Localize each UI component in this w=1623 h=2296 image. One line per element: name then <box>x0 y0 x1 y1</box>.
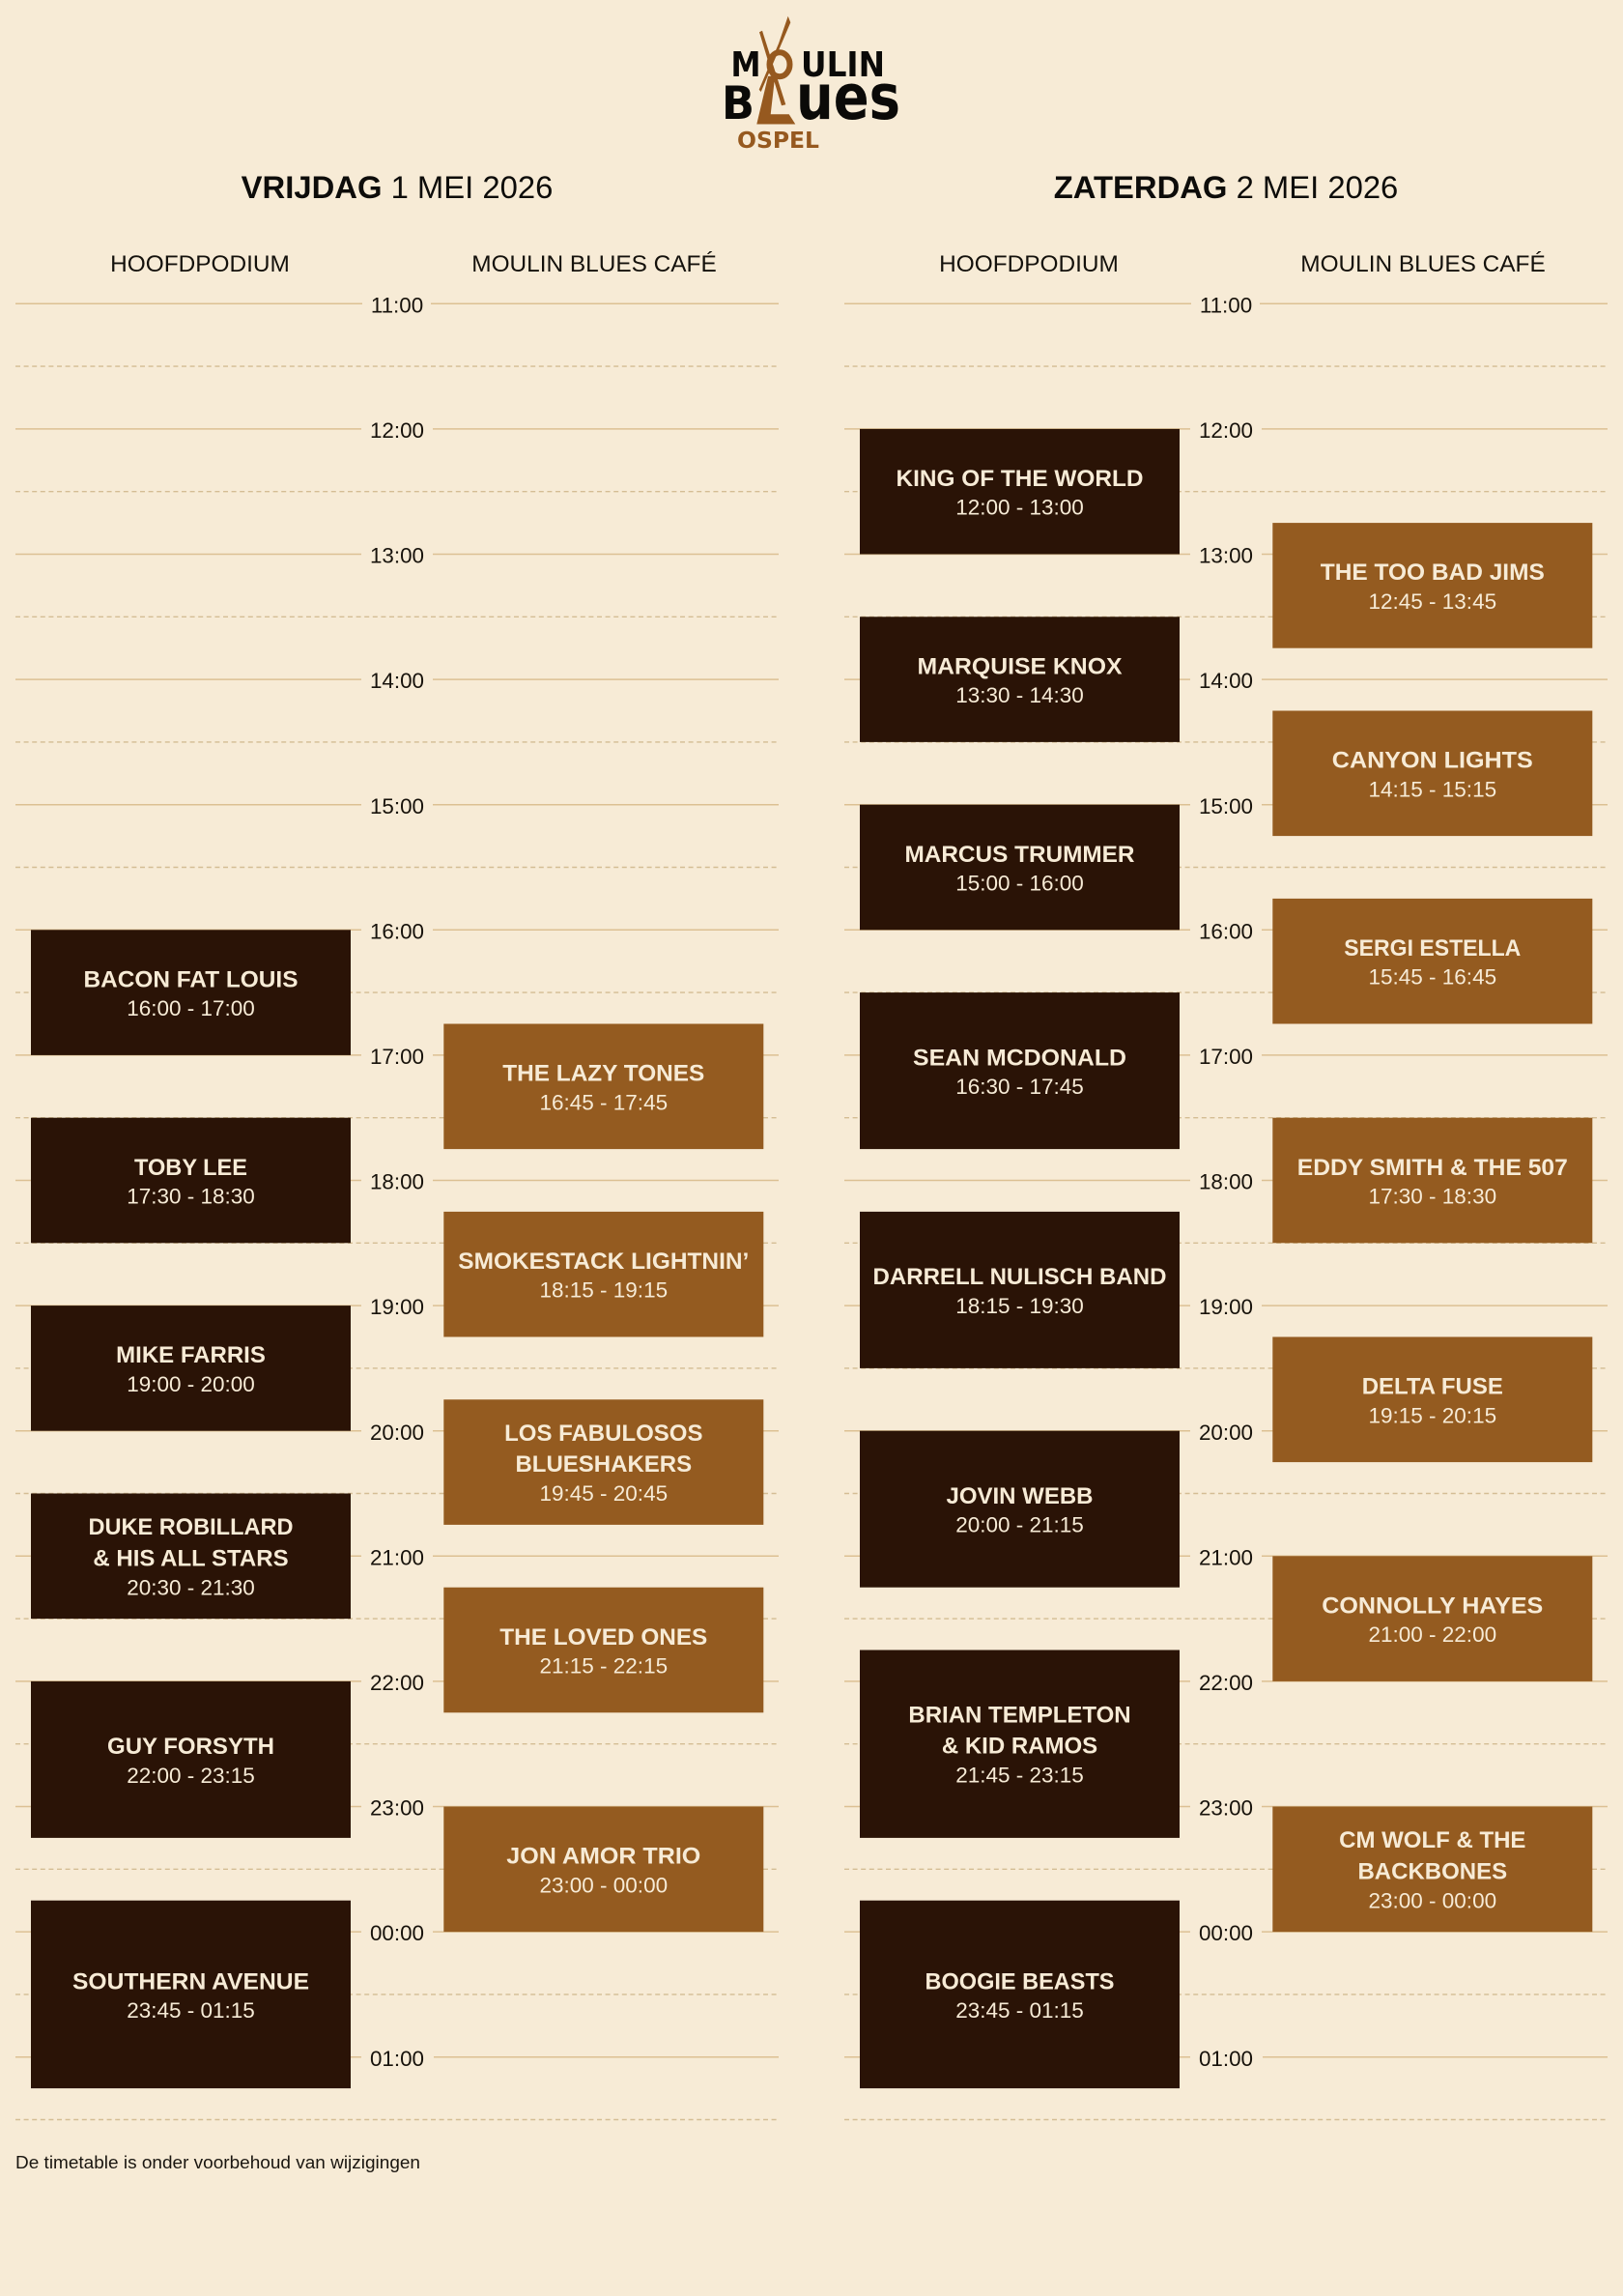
time axis vrijdag: 01:00 <box>370 2047 424 2071</box>
time axis zaterdag: 19:00 <box>1199 1295 1253 1319</box>
act: Mike Farris: MIKE FARRIS <box>116 1342 266 1368</box>
act: Sean McDonald: 16:30 - 17:45 <box>955 1075 1084 1099</box>
act: Toby Lee: 17:30 - 18:30 <box>127 1185 255 1208</box>
act: Brian Templeton & Kid Ramos: & KID RAMOS <box>942 1734 1097 1760</box>
act: Jovin Webb: 20:00 - 21:15 <box>955 1513 1084 1537</box>
act: The Loved Ones: 21:15 - 22:15 <box>539 1654 668 1678</box>
act: Marcus Trummer: MARCUS TRUMMER <box>904 842 1134 868</box>
act: Sean McDonald: SEAN MCDONALD <box>913 1045 1126 1071</box>
act: Boogie Beasts: 23:45 - 01:15 <box>955 1998 1084 2023</box>
act: Smokestack Lightnin': 18:15 - 19:15 <box>539 1278 668 1303</box>
time axis zaterdag: 18:00 <box>1199 1170 1253 1194</box>
act: Guy Forsyth: GUY FORSYTH <box>107 1734 274 1760</box>
act: CM Wolf & The Backbones <box>1272 1807 1592 1932</box>
time axis zaterdag: 23:00 <box>1199 1796 1253 1821</box>
act: Duke Robillard & His All Stars: & HIS ALL STARS <box>93 1545 289 1571</box>
act: King of the World: 12:00 - 13:00 <box>955 496 1084 520</box>
act: Sean McDonald <box>860 992 1180 1149</box>
act: Canyon Lights <box>1272 711 1592 836</box>
logo: Moulin Blues Ospel: M <box>730 45 761 85</box>
time axis vrijdag: 13:00 <box>370 544 424 568</box>
act: The Lazy Tones <box>443 1024 763 1149</box>
time axis zaterdag: 00:00 <box>1199 1921 1253 1945</box>
act: Toby Lee: TOBY LEE <box>134 1155 247 1181</box>
act: Los Fabulosos Blueshakers: 19:45 - 20:45 <box>539 1481 668 1506</box>
act: Mike Farris: 19:00 - 20:00 <box>127 1372 255 1396</box>
act: Los Fabulosos Blueshakers: BLUESHAKERS <box>515 1451 692 1478</box>
act: Duke Robillard & His All Stars: 20:30 - 21:30 <box>127 1575 255 1599</box>
act: Delta Fuse: 19:15 - 20:15 <box>1368 1403 1496 1427</box>
act: Smokestack Lightnin': SMOKESTACK LIGHTNIN’ <box>458 1248 749 1275</box>
time axis zaterdag: 14:00 <box>1199 669 1253 693</box>
act: Eddy Smith & The 507: 17:30 - 18:30 <box>1368 1185 1496 1208</box>
act: Bacon Fat Louis: 16:00 - 17:00 <box>127 996 255 1020</box>
act: Los Fabulosos Blueshakers <box>443 1399 763 1525</box>
act: Sergi Estella: 15:45 - 16:45 <box>1368 965 1496 990</box>
time axis zaterdag: 20:00 <box>1199 1421 1253 1445</box>
time axis zaterdag: 12:00 <box>1199 418 1253 443</box>
act: Toby Lee <box>31 1118 351 1243</box>
time axis zaterdag: 13:00 <box>1199 544 1253 568</box>
time axis vrijdag: 17:00 <box>370 1045 424 1069</box>
logo: Moulin Blues Ospel: ULIN <box>801 45 885 85</box>
time axis vrijdag: 16:00 <box>370 919 424 943</box>
act: Duke Robillard & His All Stars: DUKE ROBILLARD <box>89 1514 294 1540</box>
time axis vrijdag: 15:00 <box>370 794 424 818</box>
act: Canyon Lights: 14:15 - 15:15 <box>1368 777 1496 801</box>
act: Smokestack Lightnin' <box>443 1212 763 1337</box>
time axis zaterdag: 21:00 <box>1199 1545 1253 1569</box>
column heading: Hoofdpodium zaterdag: HOOFDPODIUM <box>939 251 1119 277</box>
act: Marquise Knox <box>860 617 1180 742</box>
act: The Lazy Tones: 16:45 - 17:45 <box>539 1090 668 1114</box>
time axis zaterdag: 11:00 <box>1200 294 1252 318</box>
act: Mike Farris <box>31 1306 351 1431</box>
act: Brian Templeton & Kid Ramos <box>860 1650 1180 1838</box>
act: Delta Fuse <box>1272 1337 1592 1462</box>
act: CM Wolf & The Backbones: BACKBONES <box>1357 1858 1507 1884</box>
act: Darrell Nulisch Band <box>860 1212 1180 1368</box>
logo: Moulin Blues Ospel: ues <box>796 62 900 134</box>
act: The Loved Ones: THE LOVED ONES <box>499 1624 707 1650</box>
time axis zaterdag <box>1190 290 1263 2071</box>
time axis zaterdag: 17:00 <box>1199 1045 1253 1069</box>
act: Marcus Trummer: 15:00 - 16:00 <box>955 872 1084 895</box>
act: CM Wolf & The Backbones: CM WOLF & THE <box>1339 1827 1525 1853</box>
act: Eddy Smith & The 507: EDDY SMITH & THE 507 <box>1297 1155 1568 1181</box>
column heading: Hoofdpodium vrijdag: HOOFDPODIUM <box>110 251 290 277</box>
act: Duke Robillard & His All Stars <box>31 1494 351 1619</box>
act: Jon Amor Trio: JON AMOR TRIO <box>506 1844 700 1870</box>
act: Southern Avenue: 23:45 - 01:15 <box>127 1998 255 2023</box>
act: Connolly Hayes <box>1272 1556 1592 1681</box>
act: CM Wolf & The Backbones: 23:00 - 00:00 <box>1368 1888 1496 1912</box>
time axis vrijdag: 23:00 <box>370 1796 424 1821</box>
act: Boogie Beasts: BOOGIE BEASTS <box>925 1968 1115 1995</box>
act: Southern Avenue <box>31 1901 351 2088</box>
column heading: Moulin Blues Café vrijdag: MOULIN BLUES CAFÉ <box>471 251 717 277</box>
act: Bacon Fat Louis <box>31 930 351 1055</box>
footnote: De timetable is onder voorbehoud van wijzigingen <box>15 2152 420 2172</box>
act: Delta Fuse: DELTA FUSE <box>1362 1374 1503 1400</box>
act: The Too Bad Jims: 12:45 - 13:45 <box>1368 589 1496 614</box>
act: Darrell Nulisch Band: DARRELL NULISCH BAND <box>873 1264 1167 1290</box>
act: Bacon Fat Louis: BACON FAT LOUIS <box>83 966 298 992</box>
act: Sergi Estella <box>1272 899 1592 1024</box>
heading: Zaterdag: ZATERDAG 2 MEI 2026 <box>1054 169 1398 205</box>
time axis vrijdag: 18:00 <box>370 1170 424 1194</box>
time axis vrijdag: 19:00 <box>370 1295 424 1319</box>
time axis zaterdag: 15:00 <box>1199 794 1253 818</box>
act: Marquise Knox: MARQUISE KNOX <box>918 653 1123 679</box>
time axis zaterdag: 16:00 <box>1199 919 1253 943</box>
act: Guy Forsyth <box>31 1681 351 1838</box>
time axis vrijdag: 21:00 <box>370 1545 424 1569</box>
act: Connolly Hayes: 21:00 - 22:00 <box>1368 1622 1496 1647</box>
time axis vrijdag: 12:00 <box>370 418 424 443</box>
act: Jovin Webb: JOVIN WEBB <box>946 1483 1094 1509</box>
time axis vrijdag: 22:00 <box>370 1671 424 1695</box>
act: Marcus Trummer <box>860 805 1180 930</box>
heading: Vrijdag: VRIJDAG 1 MEI 2026 <box>242 169 553 205</box>
act: The Too Bad Jims: THE TOO BAD JIMS <box>1321 560 1545 586</box>
act: Jon Amor Trio <box>443 1807 763 1932</box>
time axis zaterdag: 22:00 <box>1199 1671 1253 1695</box>
act: The Loved Ones <box>443 1588 763 1712</box>
column heading: Moulin Blues Café zaterdag: MOULIN BLUES CAFÉ <box>1300 251 1546 277</box>
act: King of the World: KING OF THE WORLD <box>897 466 1144 492</box>
act: Boogie Beasts <box>860 1901 1180 2088</box>
act: Canyon Lights: CANYON LIGHTS <box>1332 748 1533 774</box>
act: Eddy Smith & The 507 <box>1272 1118 1592 1243</box>
act: Jovin Webb <box>860 1431 1180 1588</box>
act: Los Fabulosos Blueshakers: LOS FABULOSOS <box>504 1421 702 1447</box>
act: Marquise Knox: 13:30 - 14:30 <box>955 683 1084 707</box>
time axis vrijdag: 00:00 <box>370 1921 424 1945</box>
act: The Too Bad Jims <box>1272 523 1592 648</box>
act: Guy Forsyth: 22:00 - 23:15 <box>127 1764 255 1788</box>
time axis vrijdag: 11:00 <box>371 294 423 318</box>
act: The Lazy Tones: THE LAZY TONES <box>502 1061 704 1087</box>
act: Connolly Hayes: CONNOLLY HAYES <box>1322 1593 1543 1619</box>
act: Brian Templeton & Kid Ramos: BRIAN TEMPLETON <box>908 1703 1131 1729</box>
act: King of the World <box>860 429 1180 555</box>
act: Jon Amor Trio: 23:00 - 00:00 <box>539 1873 668 1897</box>
logo: Moulin Blues Ospel: OSPEL <box>737 129 819 154</box>
act: Darrell Nulisch Band: 18:15 - 19:30 <box>955 1294 1084 1318</box>
logo: Moulin Blues Ospel: B <box>722 77 755 130</box>
act: Southern Avenue: SOUTHERN AVENUE <box>72 1968 309 1995</box>
time axis vrijdag: 20:00 <box>370 1421 424 1445</box>
grid lines zaterdag <box>844 303 1608 2119</box>
time axis zaterdag: 01:00 <box>1199 2047 1253 2071</box>
time axis vrijdag: 14:00 <box>370 669 424 693</box>
act: Sergi Estella: SERGI ESTELLA <box>1344 935 1521 961</box>
act: Brian Templeton & Kid Ramos: 21:45 - 23:15 <box>955 1764 1084 1788</box>
time axis vrijdag <box>361 290 434 2071</box>
logo: Moulin Blues Ospel <box>722 16 900 154</box>
grid lines vrijdag <box>15 303 779 2119</box>
